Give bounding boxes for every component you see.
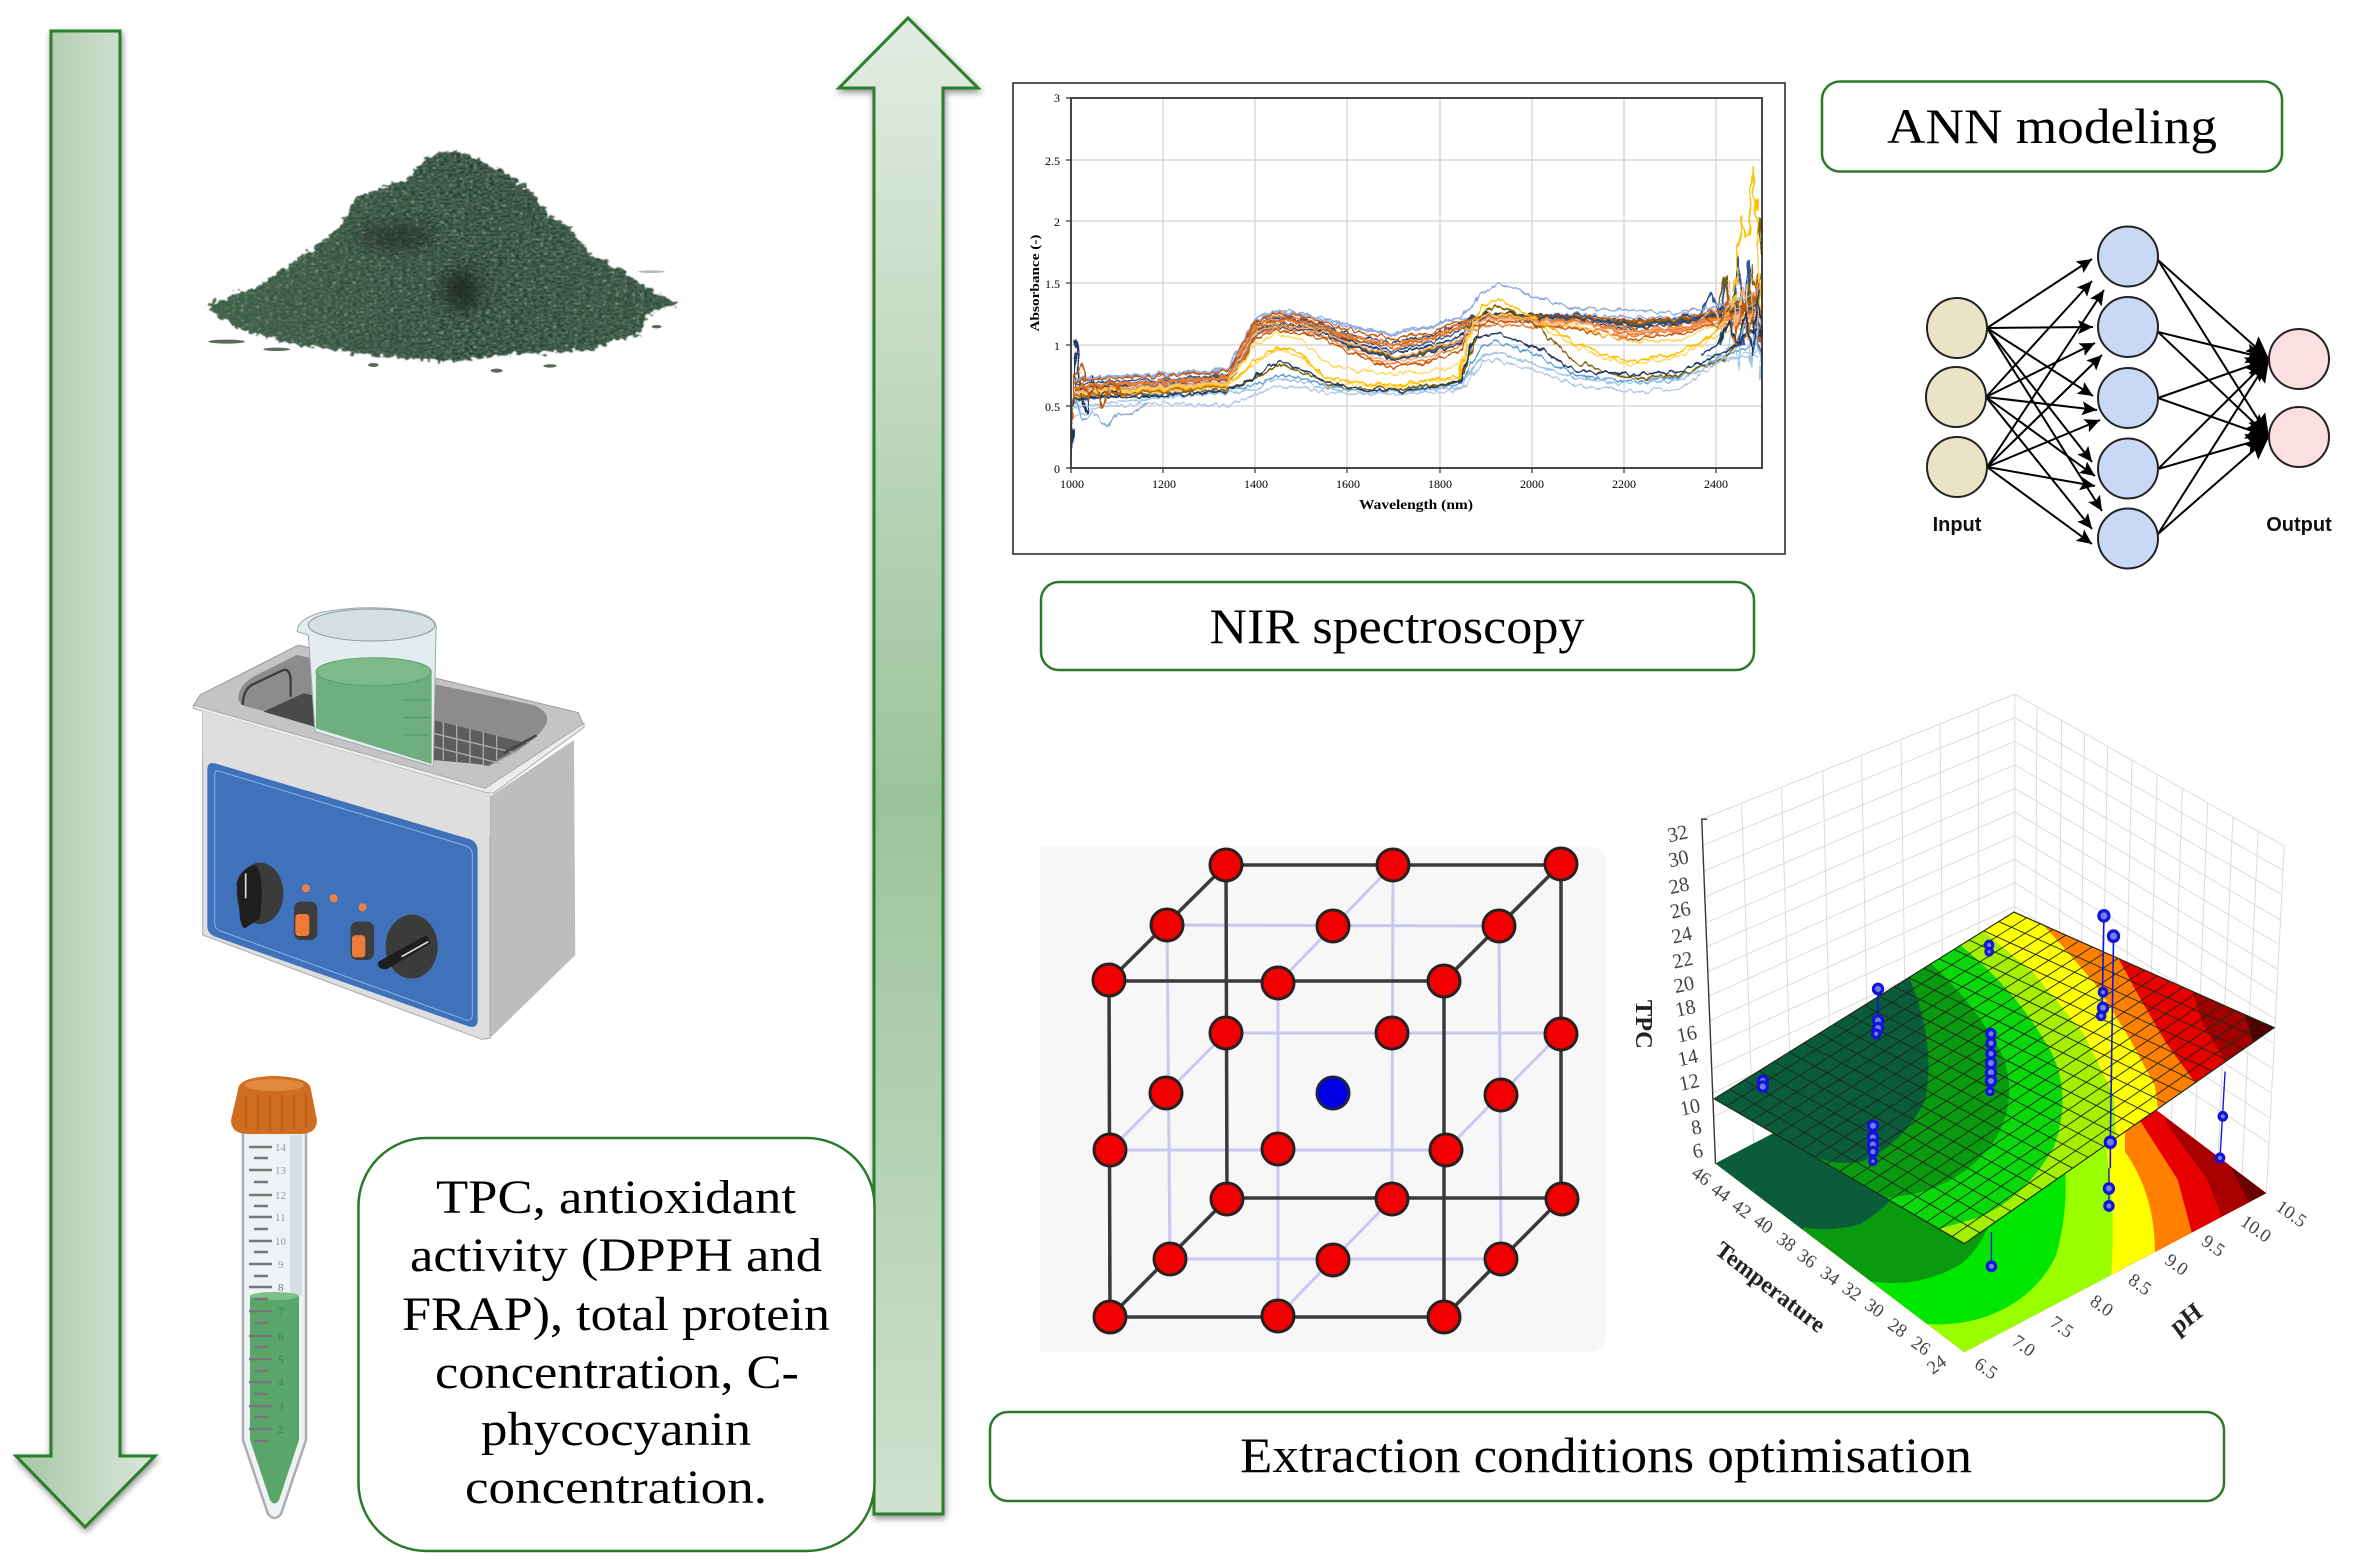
input nodes — [1926, 298, 1987, 497]
red design points — [1093, 848, 1578, 1333]
temperature axis labels: 44 — [1707, 1179, 1734, 1207]
label box: NIR spectroscopy — [1041, 582, 1754, 670]
text box: measured responses: concentration, C- — [435, 1346, 799, 1399]
temperature axis labels: 28 — [1884, 1314, 1911, 1342]
z axis labels: 26 — [1668, 898, 1693, 924]
pH axis labels — [1970, 1196, 2310, 1384]
noisy start of spectra — [1071, 363, 1123, 430]
icon: spirulina powder pile — [208, 152, 680, 373]
front lip — [193, 705, 584, 793]
bath well — [238, 655, 547, 767]
temperature axis labels — [1688, 1162, 1951, 1379]
pH axis labels: 8.5 — [2124, 1269, 2155, 1300]
noisy end of spectra — [1701, 255, 1761, 360]
x axis labels: 2200 — [1612, 477, 1636, 491]
y axis labels — [1045, 91, 1060, 476]
right knob — [378, 915, 438, 979]
lower data points — [1987, 1072, 2226, 1271]
surface outline — [1714, 912, 2274, 1244]
graduation numbers: 9 — [278, 1259, 284, 1271]
x axis labels: 1800 — [1428, 477, 1452, 491]
text box: measured responses: TPC, antioxidant — [436, 1171, 797, 1224]
noisy end of spectra — [1701, 280, 1761, 340]
arrow: downward process arrow — [16, 31, 155, 1527]
pH axis labels: 8.0 — [2086, 1291, 2117, 1322]
x axis labels: 1400 — [1244, 477, 1268, 491]
label box: ANN modeling: ANN modeling — [1887, 98, 2217, 154]
graduation marks — [249, 1147, 272, 1441]
spectra lines — [1071, 167, 1761, 457]
y axis labels: 0.5 — [1045, 400, 1060, 414]
icon: centrifuge tube — [231, 1076, 317, 1518]
graduation numbers: 12 — [275, 1190, 286, 1202]
z axis labels: 24 — [1670, 923, 1694, 949]
temperature axis labels: 40 — [1750, 1210, 1777, 1239]
TPC axis title: TPC — [1630, 1000, 1657, 1049]
output nodes — [2269, 329, 2329, 467]
graduation numbers: 5 — [278, 1354, 284, 1366]
y axis labels: 2 — [1054, 215, 1060, 229]
tube liquid — [250, 1296, 299, 1504]
z axis labels: 12 — [1677, 1070, 1701, 1096]
pH axis labels: 9.5 — [2198, 1231, 2228, 1262]
z axis labels: 18 — [1673, 996, 1698, 1022]
icon: ultrasonic bath with beaker — [193, 608, 584, 1039]
graduation numbers: 13 — [275, 1165, 286, 1177]
output label: Output — [2266, 514, 2332, 536]
diagram: artificial neural network — [1926, 226, 2332, 568]
label box: extraction conditions optimisation — [990, 1412, 2224, 1501]
y axis labels: 2.5 — [1045, 154, 1060, 168]
input to hidden connections — [1986, 259, 2104, 544]
z axis labels: 20 — [1672, 972, 1696, 998]
graduation numbers — [275, 1142, 286, 1436]
z axis labels: 14 — [1676, 1045, 1700, 1071]
tube cap — [231, 1076, 317, 1134]
temperature axis labels: 46 — [1688, 1162, 1715, 1191]
hidden to output connections — [2158, 260, 2269, 534]
temperature axis labels: 42 — [1728, 1195, 1755, 1224]
x axis labels: 1000 — [1060, 477, 1084, 491]
diagram: Box-Behnken style cube design — [1040, 846, 1607, 1352]
x axis title: Wavelength (nm) — [1359, 498, 1473, 513]
x axis labels: 1200 — [1152, 477, 1176, 491]
blue control panel — [207, 763, 478, 1027]
pH axis labels: 7.0 — [2008, 1331, 2039, 1362]
temperature axis title: Temperature — [1710, 1237, 1830, 1339]
z axis labels: 6 — [1691, 1140, 1705, 1164]
label box: NIR spectroscopy: NIR spectroscopy — [1210, 598, 1584, 654]
chart: 3D response surface of TPC — [1620, 680, 2310, 1388]
noisy start of spectra — [1071, 338, 1126, 457]
left switch — [294, 902, 317, 940]
surface mesh — [1727, 918, 2261, 1237]
text box: measured responses: concentration. — [465, 1461, 767, 1514]
faint blue lattice — [1110, 865, 1561, 1316]
temperature axis labels: 38 — [1773, 1228, 1800, 1257]
plot frame — [1066, 98, 1762, 473]
bath front face — [203, 712, 490, 1039]
pH axis labels: 10.5 — [2272, 1196, 2310, 1232]
beaker — [297, 608, 436, 767]
fitted surface — [1715, 912, 2273, 1243]
z axis labels: 8 — [1689, 1116, 1704, 1140]
graduation numbers: 11 — [275, 1212, 286, 1224]
label box: extraction conditions optimisation: Extraction conditions optimisation — [1240, 1427, 1972, 1483]
gridlines — [1071, 98, 1762, 468]
bath rim — [193, 645, 584, 793]
wall grid — [1702, 694, 2284, 1193]
z axis labels — [1666, 821, 1705, 1164]
y axis labels: 0 — [1054, 462, 1060, 476]
wire basket — [243, 670, 537, 765]
z axis line — [1702, 819, 1715, 1163]
input label: Input — [1933, 514, 1982, 536]
z axis labels: 30 — [1667, 846, 1691, 872]
blue centre point — [1317, 1077, 1349, 1109]
z axis labels: 10 — [1678, 1095, 1702, 1121]
pH axis title: pH — [2165, 1298, 2208, 1340]
y axis labels: 1.5 — [1045, 277, 1060, 291]
pH axis labels: 9.0 — [2161, 1250, 2192, 1281]
text box: measured responses — [358, 1138, 874, 1551]
text box: measured responses: activity (DPPH and — [410, 1229, 822, 1282]
graduation numbers: 14 — [275, 1142, 286, 1154]
temperature axis labels: 30 — [1861, 1294, 1888, 1323]
graduation numbers: 4 — [278, 1377, 284, 1389]
graduation numbers: 7 — [278, 1306, 284, 1318]
x axis labels — [1060, 477, 1728, 491]
temperature axis labels: 24 — [1923, 1351, 1951, 1379]
label box: ANN modeling — [1822, 82, 2282, 172]
x axis labels: 2000 — [1520, 477, 1544, 491]
arrow: upward process arrow — [839, 18, 978, 1514]
hidden nodes — [2098, 226, 2158, 568]
cube edges — [1109, 864, 1562, 1317]
temperature axis labels: 36 — [1793, 1245, 1820, 1273]
bath right side — [482, 740, 575, 1039]
pH axis labels: 7.5 — [2046, 1312, 2077, 1343]
y axis title: Absorbance (-) — [1027, 235, 1042, 331]
z axis labels: 28 — [1667, 873, 1691, 899]
upper data points — [1758, 911, 2119, 1168]
y axis labels: 1 — [1054, 339, 1060, 353]
graduation numbers: 3 — [278, 1401, 284, 1413]
graduation numbers: 10 — [275, 1236, 286, 1248]
contour floor — [1716, 1110, 2266, 1352]
x axis labels: 1600 — [1336, 477, 1360, 491]
x axis labels: 2400 — [1704, 477, 1728, 491]
y axis labels: 3 — [1054, 91, 1060, 105]
temperature axis labels: 26 — [1907, 1332, 1934, 1360]
z axis labels: 16 — [1675, 1022, 1699, 1048]
left knob — [237, 863, 283, 928]
temperature axis labels: 34 — [1816, 1262, 1844, 1291]
temperature axis labels: 32 — [1838, 1278, 1865, 1306]
pH axis labels: 10.0 — [2237, 1211, 2275, 1247]
indicator lights — [302, 884, 367, 911]
right switch — [351, 922, 374, 960]
graduation numbers: 2 — [278, 1424, 284, 1436]
text box: measured responses: FRAP), total protein — [402, 1288, 830, 1341]
z axis labels: 32 — [1666, 821, 1690, 847]
chart: NIR spectra — [1013, 83, 1785, 554]
graduation numbers: 8 — [278, 1282, 284, 1294]
text box: measured responses: phycocyanin — [481, 1403, 751, 1456]
z axis labels: 22 — [1671, 948, 1695, 974]
graduation numbers: 6 — [278, 1331, 284, 1343]
pH axis labels: 6.5 — [1970, 1353, 2001, 1384]
